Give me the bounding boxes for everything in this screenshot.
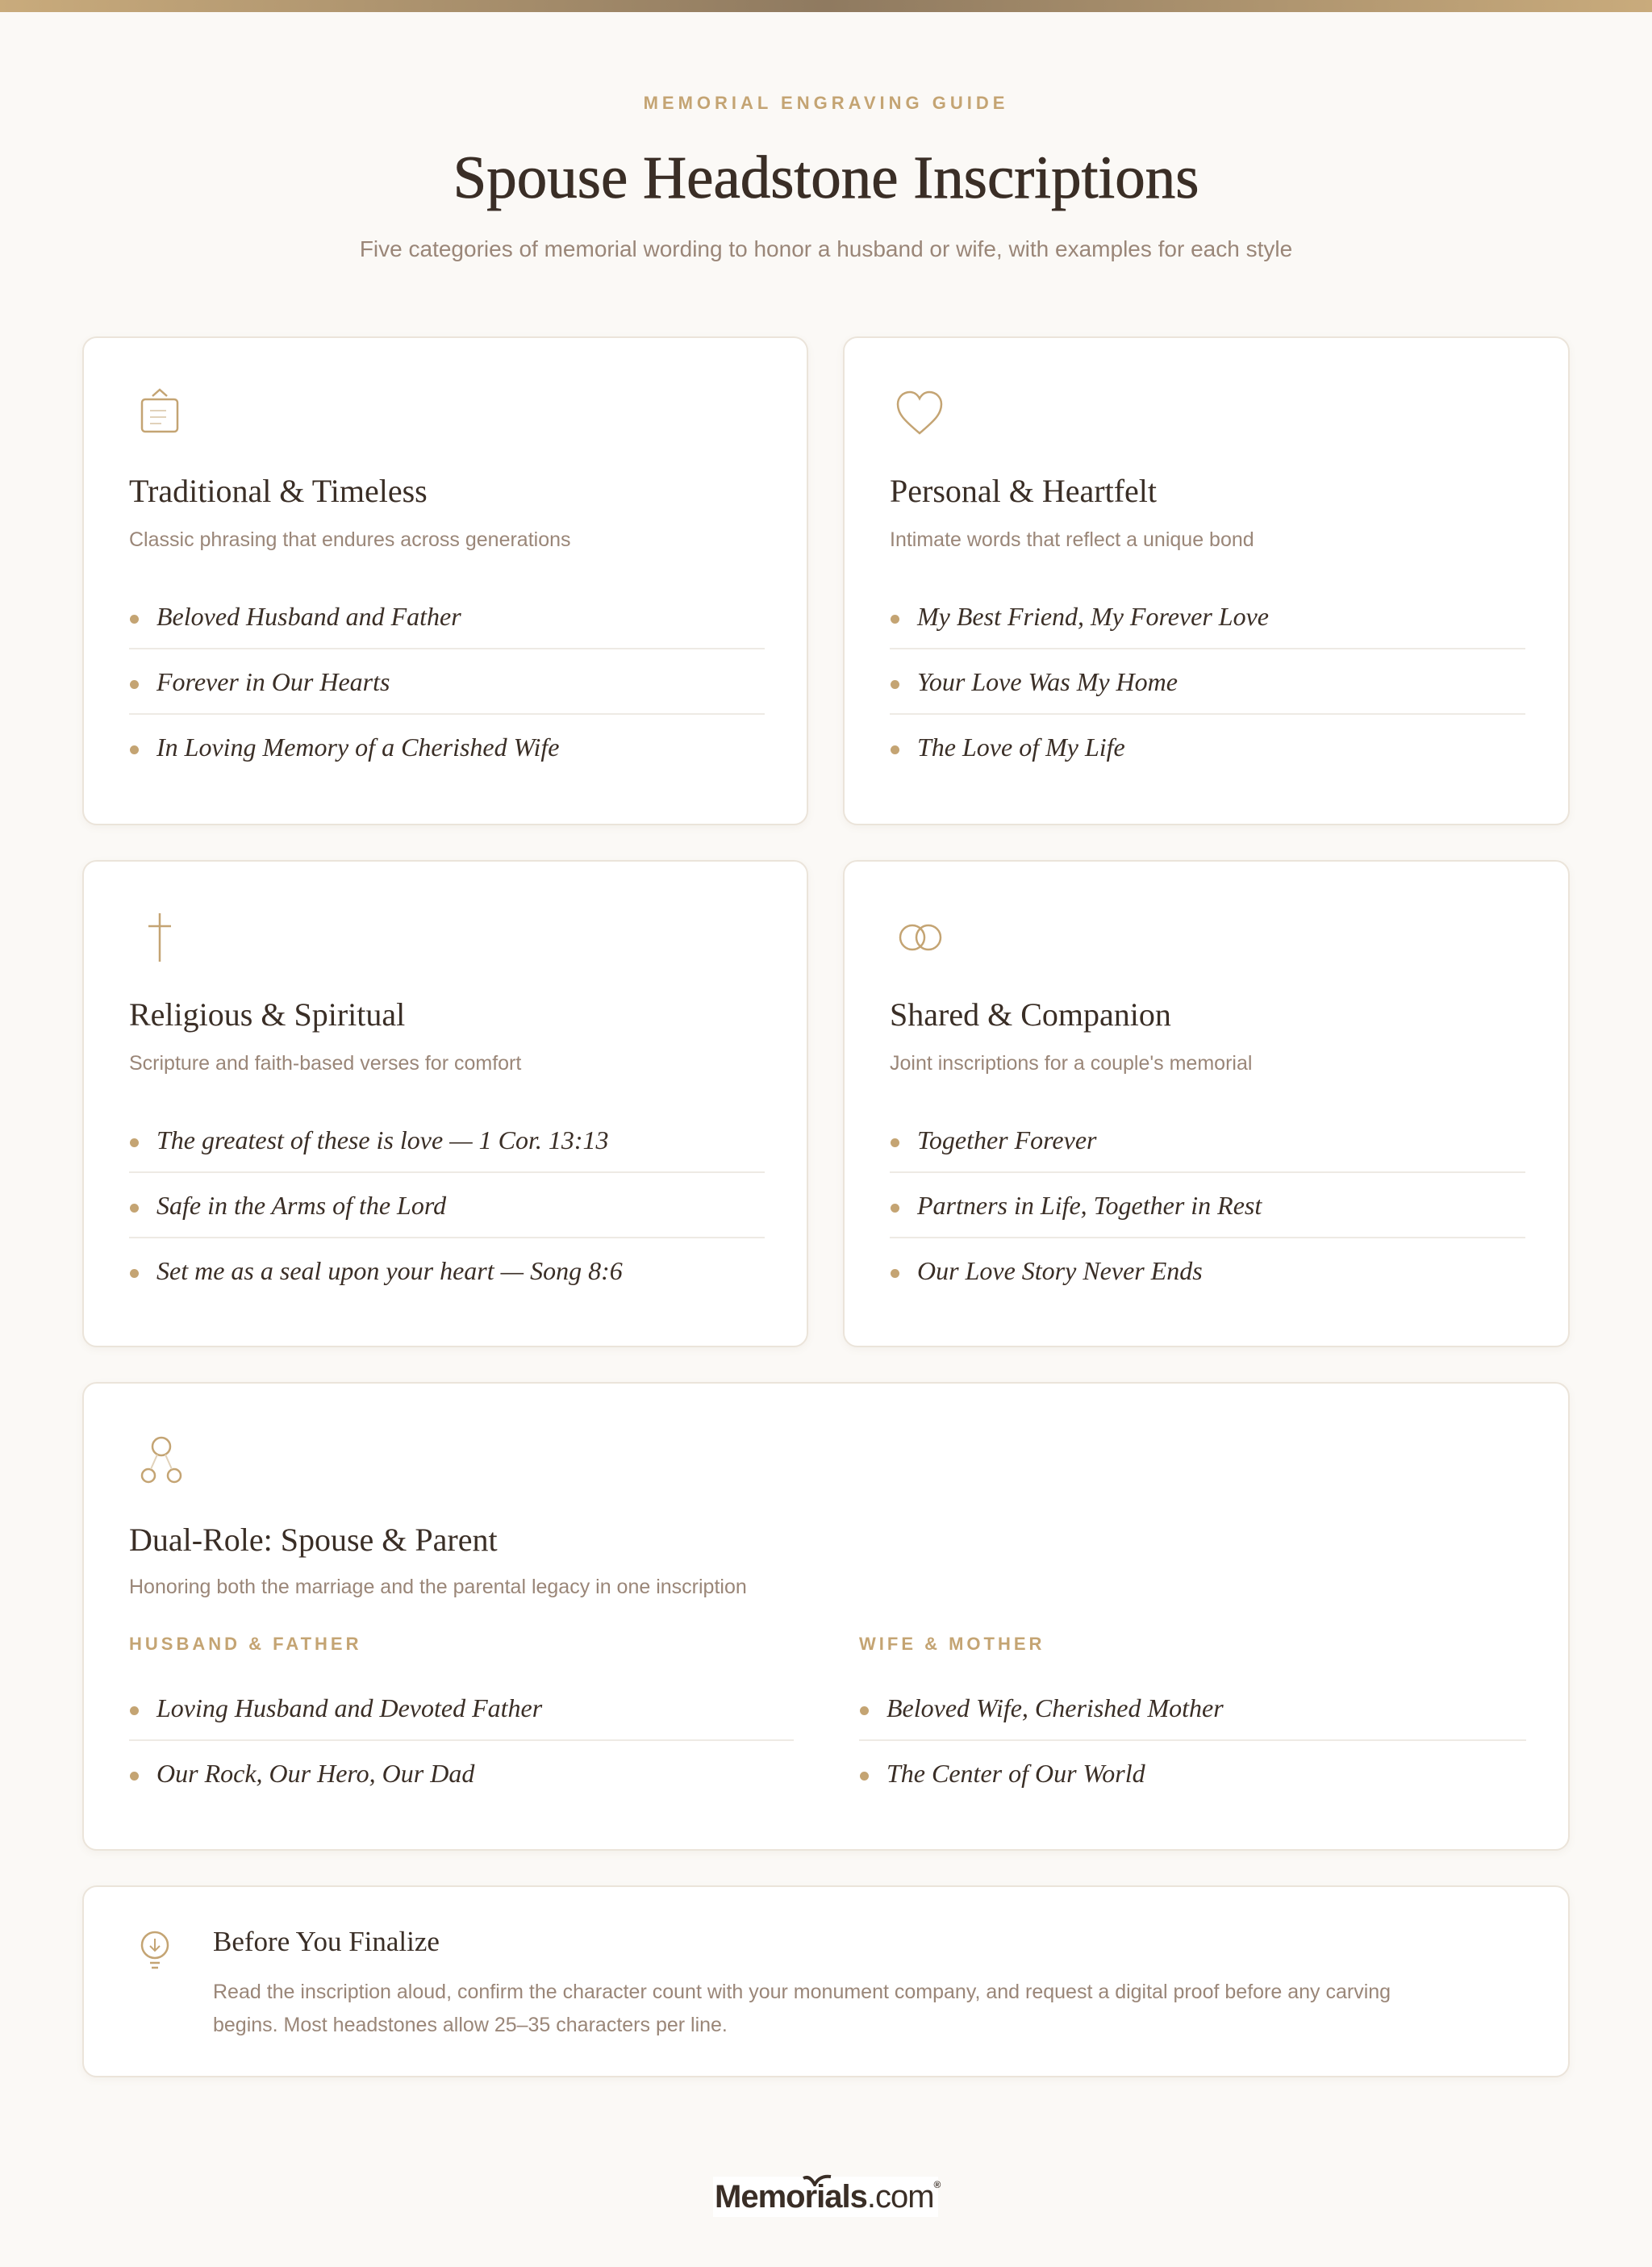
list bbox=[129, 1125, 765, 1285]
panel: traditional bbox=[82, 336, 808, 825]
list: husband: Our Rock, Our Hero, Our Dad bbox=[156, 1759, 474, 1788]
list: Beloved Husband and Father bbox=[156, 602, 461, 631]
list: Safe in the Arms of the Lord bbox=[156, 1191, 446, 1220]
list: husband bbox=[129, 1693, 794, 1788]
list: The Love of My Life bbox=[917, 733, 1125, 762]
tip text: Read the inscription aloud, confirm the character count with your monument company, and request a digital proof before any carving begins. Most headstones allow 25–35 characters per line. bbox=[213, 1981, 1391, 2036]
list: The greatest of these is love — 1 Cor. 13:13 bbox=[156, 1125, 609, 1154]
list: Your Love Was My Home bbox=[917, 667, 1178, 696]
description: Scripture and faith-based verses for comfort bbox=[129, 1052, 521, 1075]
icon: cross bbox=[148, 913, 171, 962]
list: wife: Beloved Wife, Cherished Mother bbox=[886, 1693, 1224, 1722]
list: In Loving Memory of a Cherished Wife bbox=[156, 733, 559, 762]
subheading: wife: WIFE & MOTHER bbox=[859, 1634, 1045, 1654]
panel: personal bbox=[843, 336, 1570, 825]
panel: religious bbox=[82, 860, 808, 1347]
description: Joint inscriptions for a couple's memorial bbox=[890, 1052, 1252, 1075]
tip title: Before You Finalize bbox=[213, 1926, 440, 1957]
panel: dual-role bbox=[82, 1382, 1570, 1851]
list: wife: The Center of Our World bbox=[886, 1759, 1145, 1788]
icon: lightbulb bbox=[140, 1931, 169, 1968]
list: Our Love Story Never Ends bbox=[917, 1256, 1203, 1285]
list: Partners in Life, Together in Rest bbox=[917, 1191, 1262, 1220]
list bbox=[890, 1125, 1525, 1285]
heading: Traditional & Timeless bbox=[129, 473, 428, 509]
subtitle: Five categories of memorial wording to honor a husband or wife, with examples for each style bbox=[360, 236, 1292, 261]
icon: rings bbox=[899, 925, 942, 950]
list: husband: Loving Husband and Devoted Father bbox=[156, 1693, 542, 1722]
logo: Memorials.com® bbox=[715, 2179, 940, 2215]
heading: Shared & Companion bbox=[890, 996, 1171, 1033]
icon: family bbox=[140, 1436, 182, 1483]
list: Set me as a seal upon your heart — Song 8:6 bbox=[156, 1256, 623, 1285]
panel: tip bbox=[82, 1885, 1570, 2077]
title: Spouse Headstone Inscriptions bbox=[453, 144, 1199, 211]
list bbox=[890, 602, 1525, 762]
heading: Personal & Heartfelt bbox=[890, 473, 1157, 509]
panel: shared bbox=[843, 860, 1570, 1347]
icon: heart bbox=[897, 390, 942, 434]
subheading: husband: HUSBAND & FATHER bbox=[129, 1634, 361, 1654]
heading: Dual-Role: Spouse & Parent bbox=[129, 1522, 498, 1558]
description: Classic phrasing that endures across generations bbox=[129, 528, 571, 551]
list: Forever in Our Hearts bbox=[156, 667, 390, 696]
icon: tablet bbox=[140, 389, 179, 432]
description: Intimate words that reflect a unique bond bbox=[890, 528, 1254, 551]
list: My Best Friend, My Forever Love bbox=[917, 602, 1269, 631]
description: Honoring both the marriage and the parental legacy in one inscription bbox=[129, 1576, 747, 1598]
kicker: MEMORIAL ENGRAVING GUIDE bbox=[644, 93, 1008, 113]
list bbox=[129, 602, 765, 762]
top bar bbox=[0, 0, 1652, 12]
list: Together Forever bbox=[917, 1125, 1096, 1154]
heading: Religious & Spiritual bbox=[129, 996, 405, 1033]
list: wife bbox=[859, 1693, 1526, 1788]
